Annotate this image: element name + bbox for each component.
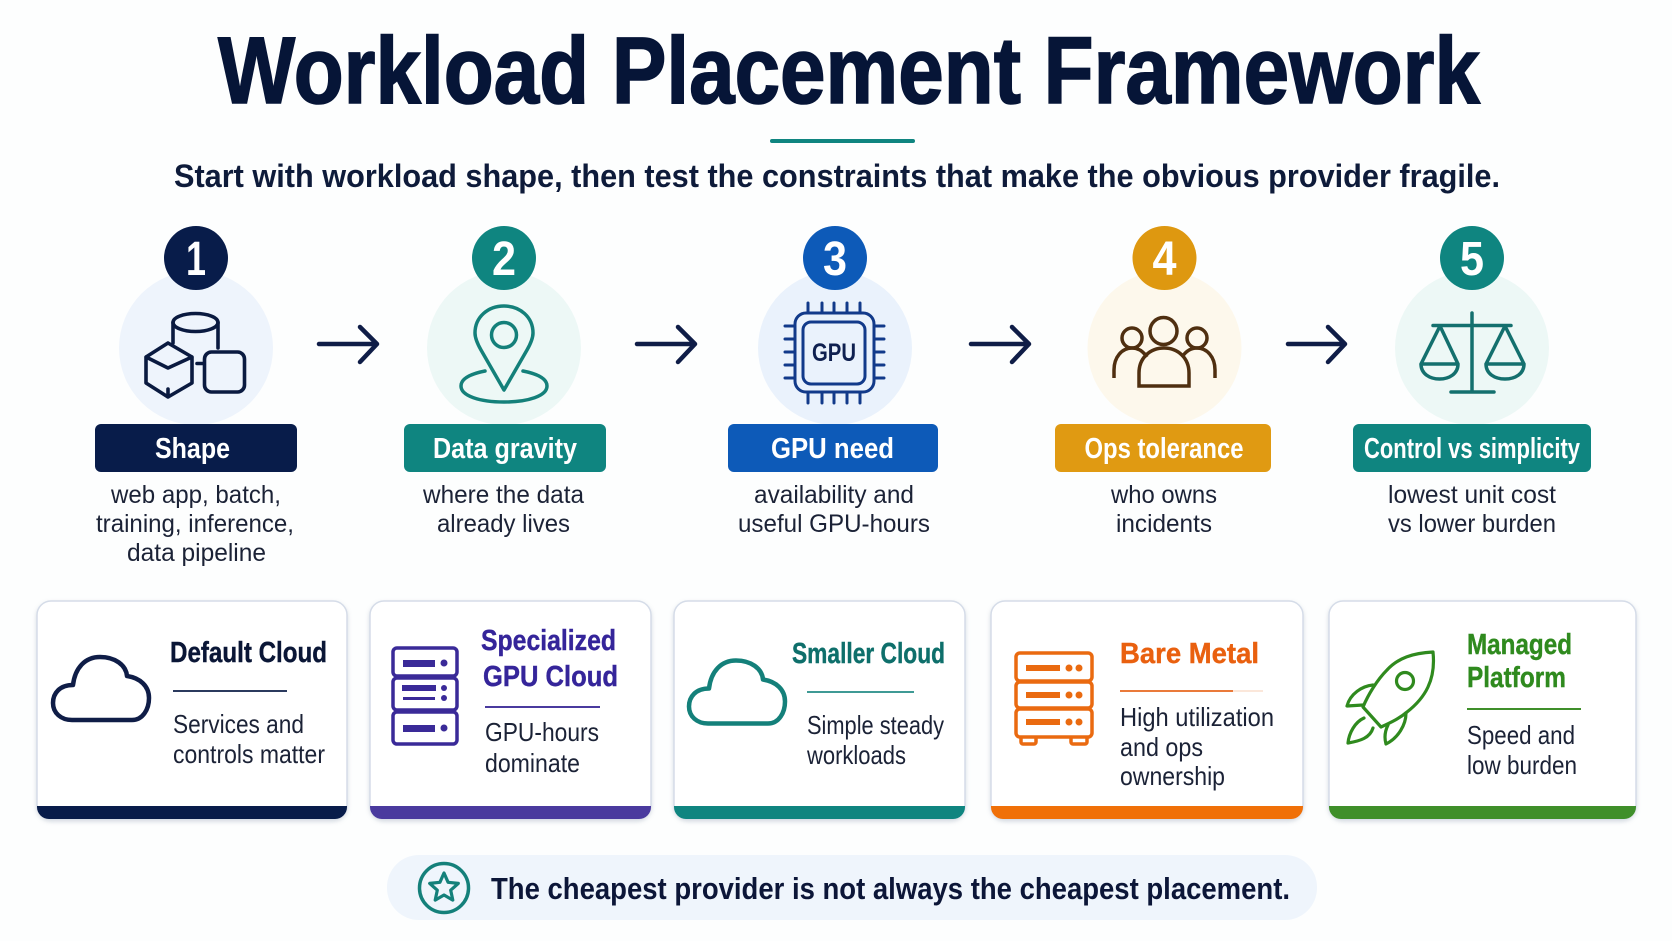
step 3 description: useful GPU-hours [738,510,930,538]
step 1 description: data pipeline [127,539,266,567]
card heading: GPU Cloud [483,661,618,693]
step 5: control vs simplicity [1353,226,1591,538]
card text: dominate [485,748,580,778]
step 4 description: who owns [1110,481,1217,509]
step 5 label [1353,424,1591,472]
icon: balance scales [1421,313,1524,392]
step 2 description [422,481,584,538]
step 5 description: lowest unit cost [1388,481,1556,509]
card text: GPU-hours [485,717,599,747]
icon: GPU server [393,648,457,744]
card heading: Managed [1467,629,1572,661]
step 2: data gravity [404,226,606,538]
step 2 number badge [472,226,536,290]
icon: server rack [1016,653,1092,744]
step 5 description [1388,481,1556,538]
card text: Services and [173,709,304,739]
icon: rocket [1347,652,1433,744]
card text: Speed and [1467,720,1575,750]
step 3 number badge [803,226,867,290]
step 5 label: Control vs simplicity [1364,433,1580,465]
step 4 number badge: 4 [1152,233,1177,286]
step 3 description [738,481,930,538]
step 4 label [1055,424,1271,472]
step 3 label [728,424,938,472]
step 1 description [96,481,294,567]
icon: cloud [689,660,785,724]
arrow 4 to 5 [1288,327,1345,362]
card heading: Default Cloud [170,637,327,669]
card text: and ops [1120,732,1203,762]
card heading [481,625,618,693]
step 1: shape [95,226,297,567]
step 4 label: Ops tolerance [1084,433,1244,465]
step 3 description: availability and [754,481,914,509]
card heading [1467,629,1572,694]
step 3: GPU need [728,226,938,538]
card heading: Specialized [481,625,616,657]
card text: ownership [1120,761,1225,791]
icon: cloud [53,657,149,720]
card heading: Platform [1467,662,1566,694]
panel: specialized GPU cloud [370,601,651,819]
card text: Simple steady [807,710,944,740]
card text: low burden [1467,750,1577,780]
card heading: Smaller Cloud [792,638,945,670]
step 1 description: web app, batch, [110,481,281,509]
step 2 description: already lives [437,510,570,538]
icon: GPU chip: GPU [812,339,856,367]
step 3 label: GPU need [771,433,894,465]
step 4 number badge [1132,226,1196,290]
step 4 description [1110,481,1217,538]
step 1 number badge [164,226,228,290]
arrow 1 to 2 [319,327,377,362]
step 2 label: Data gravity [433,433,577,465]
step 1 label: Shape [155,433,230,465]
arrow 2 to 3 [637,327,695,362]
icon: people [1114,318,1215,386]
panel: default cloud [37,601,347,819]
step 1 label [95,424,297,472]
step 3 number badge: 3 [823,233,847,286]
icon: star in circle [420,864,468,912]
card text: workloads [806,740,906,770]
step 4: ops tolerance [1055,226,1271,538]
step 4 description: incidents [1116,510,1212,538]
title: Workload Placement Framework [218,18,1480,124]
panel: bare metal [991,601,1303,819]
panel: smaller cloud [674,601,965,819]
step 2 description: where the data [422,481,584,509]
card text [485,717,599,778]
icon: location pin [461,306,547,402]
card text: controls matter [173,739,325,769]
step 1 description: training, inference, [96,510,294,538]
subtitle: Start with workload shape, then test the constraints that make the obvious provider fragile. [174,158,1500,194]
step 5 number badge: 5 [1460,233,1484,286]
card text [1467,720,1577,780]
step 2 label [404,424,606,472]
arrow 3 to 4 [971,327,1029,362]
callout [387,855,1317,920]
card text [806,710,944,770]
card text [173,709,325,769]
panel: managed platform [1329,601,1636,819]
icon: GPU chip [785,303,884,403]
step 2 number badge: 2 [492,233,516,286]
step 1 number badge: 1 [186,233,206,286]
callout text: The cheapest provider is not always the cheapest placement. [491,871,1290,906]
step 5 number badge [1440,226,1504,290]
step 5 description: vs lower burden [1388,510,1556,538]
icon: cylinder, cube and square [146,314,244,397]
card heading: Bare Metal [1120,638,1259,670]
card text: High utilization [1120,702,1274,732]
card text [1120,702,1274,791]
